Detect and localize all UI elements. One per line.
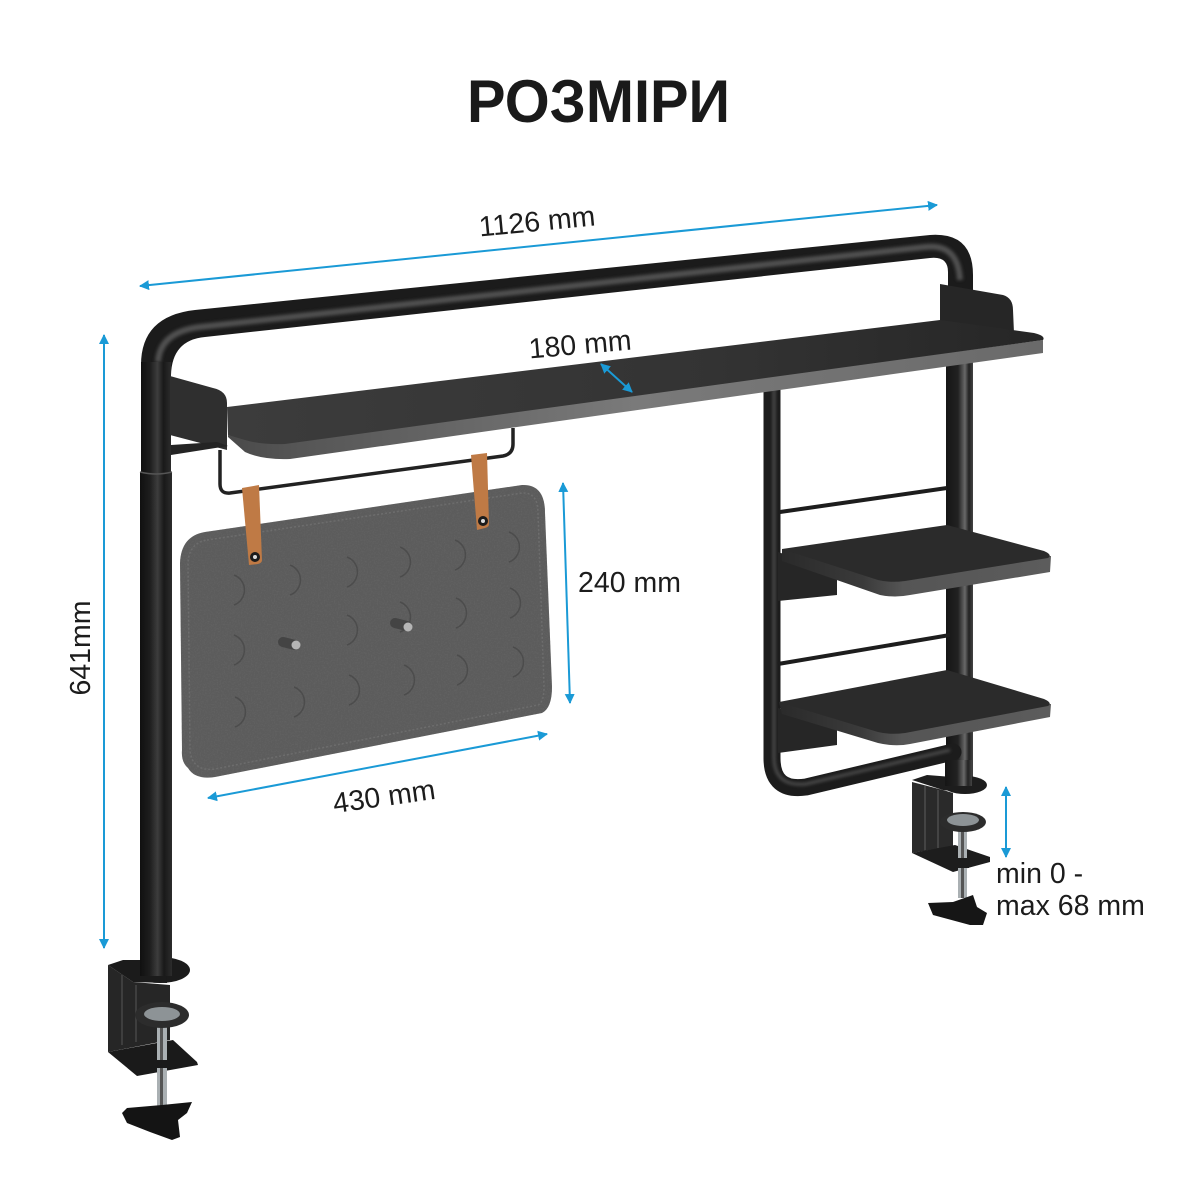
dimension: panel height 240 mm: 240 mm bbox=[578, 567, 681, 599]
title: РОЗМІРИ bbox=[467, 68, 730, 135]
second support tube with lower loop bbox=[772, 388, 953, 788]
left clamp bbox=[108, 940, 198, 1140]
dimension: clamp range: max 68 mm bbox=[996, 890, 1145, 922]
dimension: panel width 430 mm bbox=[208, 734, 547, 820]
dimension: height 641 mm: 641mm bbox=[65, 600, 97, 696]
dimension: clamp range bbox=[996, 787, 1145, 922]
dimension: shelf depth 180 mm bbox=[527, 325, 633, 392]
crossbar rods bbox=[778, 488, 950, 664]
dimension: clamp range: min 0 - bbox=[996, 858, 1083, 890]
dimension: width 1126 mm bbox=[140, 200, 937, 286]
dimension: panel height 240 mm bbox=[563, 483, 681, 703]
lower small shelf bbox=[778, 670, 1051, 753]
felt embossed arcs bbox=[234, 532, 523, 727]
leather strap right bbox=[471, 453, 489, 530]
main frame: top tube and left pole bbox=[140, 235, 973, 977]
felt stitching bbox=[188, 493, 544, 769]
upper small shelf bbox=[778, 525, 1051, 601]
right support pole bbox=[946, 360, 973, 790]
long shelf bbox=[227, 320, 1044, 459]
felt pegs bbox=[283, 622, 412, 650]
right end bracket bbox=[940, 284, 1014, 333]
dimension: panel width 430 mm: 430 mm bbox=[331, 774, 437, 820]
leather strap left bbox=[242, 485, 262, 565]
hanging rail bbox=[220, 428, 513, 493]
left end bracket bbox=[170, 376, 228, 455]
felt panel bbox=[180, 485, 552, 778]
dimension: width 1126 mm: 1126 mm bbox=[477, 200, 597, 244]
dimension: shelf depth 180 mm: 180 mm bbox=[527, 325, 633, 365]
right clamp bbox=[912, 760, 990, 925]
